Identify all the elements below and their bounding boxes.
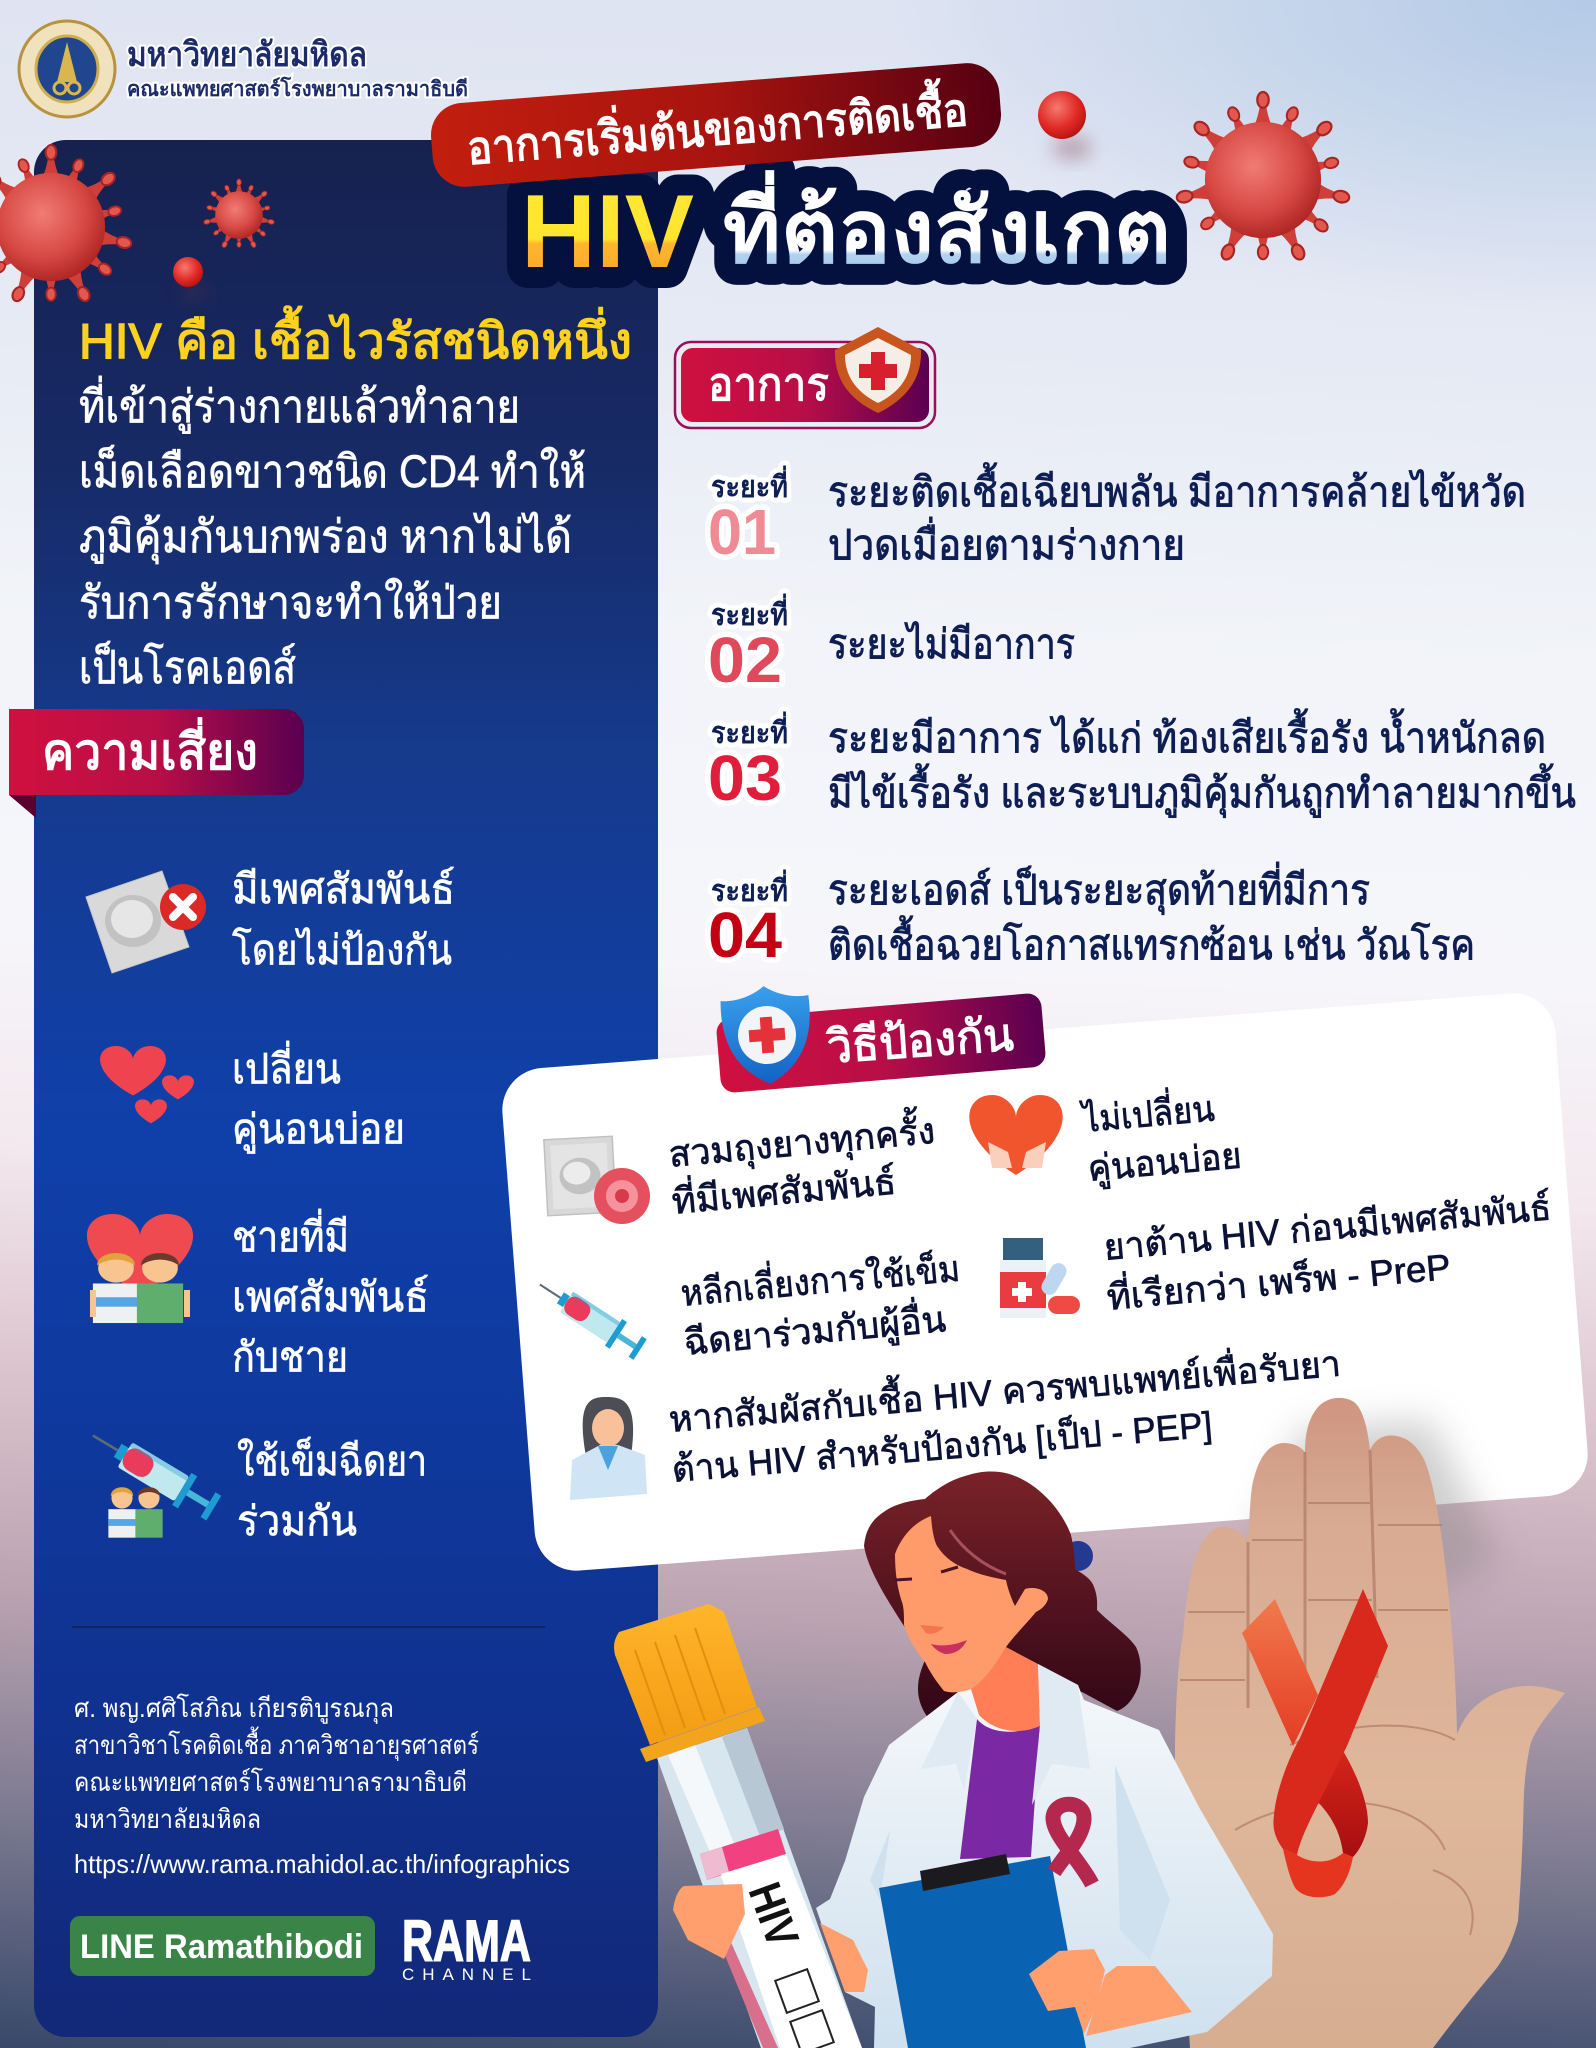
heading badge: prevention bbox=[715, 983, 1047, 1094]
hair clip bbox=[1063, 1541, 1093, 1571]
url: https://www.rama.mahidol.ac.th/infographics bbox=[74, 1849, 570, 1879]
risk item: sharing needles: ใช้เข็มฉีดยา bbox=[237, 1437, 427, 1484]
logo: Mahidol University bbox=[19, 21, 468, 117]
prevention item: avoid shared needles bbox=[531, 1244, 962, 1365]
prevention item: PEP: หากสัมผัสกับเชื้อ HIV ควรพบแพทย์เพื่อรับยา bbox=[667, 1337, 1342, 1440]
icon: shield with cross bbox=[835, 327, 921, 413]
heading badge: symptoms: อาการ bbox=[708, 358, 829, 410]
prevention item: one partner: ไม่เปลี่ยน bbox=[1078, 1084, 1216, 1140]
virus: top left large bbox=[0, 145, 133, 304]
risk item: unprotected sex bbox=[86, 866, 455, 973]
hair bbox=[864, 1471, 1141, 1719]
heading ribbon: risk: ความเสี่ยง bbox=[42, 718, 258, 780]
prevention item: condom: ที่มีเพศสัมพันธ์ bbox=[670, 1157, 898, 1222]
prevention item: PEP: ต้าน HIV สำหรับป้องกัน [เป็ป - PEP] bbox=[670, 1402, 1214, 1490]
ball: small red sphere bbox=[173, 257, 208, 300]
icon: medicine vial and pills bbox=[1000, 1238, 1080, 1318]
badge: LINE bbox=[70, 1916, 375, 1976]
risk item: men who have sex with men: กับชาย bbox=[232, 1334, 348, 1380]
risk item: men who have sex with men: เพศสัมพันธ์ bbox=[232, 1274, 429, 1320]
text block: author credit bbox=[74, 1693, 479, 1834]
title: HIV headline bbox=[521, 170, 1171, 290]
icon: male couple with heart bbox=[87, 1214, 193, 1323]
stage 1: ระยะติดเชื้อเฉียบพลัน มีอาการคล้ายไข้หวัด bbox=[828, 462, 1526, 515]
clipboard bbox=[879, 1856, 1086, 2048]
panel: prevention card bbox=[499, 990, 1591, 1574]
stage 1: ระยะที่ bbox=[711, 465, 788, 504]
prevention item: avoid shared needles: ฉีดยาร่วมกับผู้อื่น bbox=[682, 1294, 948, 1365]
icon: syringe and two men bbox=[83, 1419, 223, 1538]
shirt bbox=[960, 1719, 1040, 1859]
stage 1: 01 bbox=[708, 496, 776, 568]
illustration: doctor with test tube bbox=[614, 1471, 1273, 2048]
icon: doctor bbox=[570, 1397, 647, 1500]
risk item: men who have sex with men bbox=[87, 1209, 429, 1380]
stage 4: ติดเชื้อฉวยโอกาสแทรกซ้อน เช่น วัณโรค bbox=[828, 915, 1475, 968]
illustration: hand holding red ribbon bbox=[1175, 1398, 1565, 2048]
finger gaps and creases bbox=[1180, 1450, 1473, 1935]
collar bbox=[921, 1664, 1090, 1805]
logo: Mahidol University: มหาวิทยาลัยมหิดล bbox=[127, 36, 367, 74]
text block: author credit: มหาวิทยาลัยมหิดล bbox=[74, 1804, 261, 1834]
risk item: sharing needles bbox=[83, 1419, 427, 1544]
neck bbox=[971, 1647, 1040, 1731]
prevention item: one partner bbox=[969, 1084, 1243, 1191]
prevention item: condom: สวมถุงยางทุกครั้ง bbox=[666, 1104, 937, 1177]
prevention item: PEP bbox=[570, 1337, 1342, 1500]
cap bbox=[614, 1604, 757, 1745]
stage 2: 02 bbox=[708, 624, 782, 696]
stage 2: ระยะไม่มีอาการ bbox=[828, 621, 1075, 667]
icon: syringe bbox=[531, 1271, 649, 1363]
risk item: men who have sex with men: ชายที่มี bbox=[232, 1209, 349, 1260]
stage 4: ระยะเอดส์ เป็นระยะสุดท้ายที่มีการ bbox=[828, 862, 1370, 915]
text block: HIV explanation: ที่เข้าสู่ร่างกายแล้วทำลาย bbox=[79, 375, 520, 434]
prevention item: PrEP: ที่เรียกว่า เพร็พ - PreP bbox=[1105, 1242, 1452, 1318]
virus: top left small bbox=[203, 179, 275, 249]
text block: HIV explanation bbox=[79, 375, 586, 693]
icon: red ribbon on palm bbox=[1242, 1589, 1388, 1897]
ribbon on coat bbox=[1053, 1804, 1092, 1884]
coat bbox=[816, 1664, 1273, 2048]
text block: author credit: สาขาวิชาโรคติดเชื้อ ภาควิชาอายุรศาสตร์ bbox=[74, 1726, 479, 1761]
title: HIV headline: ที่ต้องสังเกต bbox=[723, 170, 1171, 281]
stage 4 bbox=[708, 862, 1475, 971]
text block: HIV explanation: เป็นโรคเอดส์ bbox=[79, 641, 296, 693]
logo: RAMA channel: CHANNEL bbox=[402, 1965, 531, 1984]
stage 1 bbox=[708, 462, 1526, 568]
heading badge: prevention: วิธีป้องกัน bbox=[825, 1008, 1015, 1073]
coat shading bbox=[870, 1765, 1170, 1960]
title: HIV headline: HIV bbox=[521, 174, 694, 290]
hand on clipboard bbox=[1029, 1949, 1105, 2034]
test tube: HIV bbox=[739, 1876, 809, 1954]
badge: LINE: LINE Ramathibodi bbox=[80, 1928, 363, 1966]
text block: HIV explanation: รับการรักษาจะทำให้ป่วย bbox=[79, 577, 502, 628]
prevention item: PrEP: ยาต้าน HIV ก่อนมีเพศสัมพันธ์ bbox=[1102, 1186, 1553, 1268]
prevention item: avoid shared needles: หลีกเลี่ยงการใช้เข็ม bbox=[679, 1244, 962, 1314]
prevention item: one partner: คู่นอนบ่อย bbox=[1086, 1135, 1243, 1191]
title: HIV headline: ที่ต้องสังเกต bbox=[723, 170, 1171, 281]
prevention item: PrEP bbox=[1000, 1186, 1553, 1318]
icon: condom packet bbox=[544, 1136, 650, 1224]
text block: HIV explanation: ภูมิคุ้มกันบกพร่อง หากไม่ได้ bbox=[79, 511, 572, 564]
risk item: changing partners bbox=[100, 1041, 405, 1154]
facial features bbox=[895, 1567, 967, 1654]
stage 2: ระยะที่ bbox=[711, 593, 788, 632]
stage 3: 03 bbox=[708, 742, 782, 814]
stage 1: ปวดเมื่อยตามร่างกาย bbox=[828, 517, 1185, 568]
hand shape bbox=[1175, 1398, 1565, 2048]
title: red pill subtitle: อาการเริ่มต้นของการติดเชื้อ bbox=[464, 75, 970, 175]
text block: author credit: ศ. พญ.ศศิโสภิณ เกียรติบูรณกุล bbox=[74, 1693, 394, 1724]
logo: RAMA channel: RAMA bbox=[402, 1909, 531, 1974]
stage 3 bbox=[708, 708, 1576, 818]
text block: author credit: คณะแพทยศาสตร์โรงพยาบาลรามาธิบดี bbox=[74, 1767, 467, 1797]
stage 4: 04 bbox=[708, 899, 782, 971]
text block: HIV explanation: เม็ดเลือดขาวชนิด CD4 ทำให้ bbox=[79, 445, 586, 497]
risk item: unprotected sex: โดยไม่ป้องกัน bbox=[232, 927, 452, 973]
risk item: sharing needles: ร่วมกัน bbox=[237, 1498, 357, 1544]
stage 4: ระยะที่ bbox=[711, 869, 788, 908]
risk item: changing partners: เปลี่ยน bbox=[232, 1041, 341, 1092]
ball: red sphere top bbox=[1038, 91, 1092, 160]
virus: top right large bbox=[1175, 92, 1351, 263]
icon: blue shield bbox=[719, 983, 815, 1087]
logo: Mahidol University: คณะแพทยศาสตร์โรงพยาบาลรามาธิบดี bbox=[127, 76, 468, 101]
icon: heart in hands bbox=[969, 1095, 1063, 1175]
face bbox=[895, 1516, 1048, 1692]
test tube bbox=[614, 1604, 862, 2048]
risk item: changing partners: คู่นอนบ่อย bbox=[232, 1106, 405, 1154]
heading ribbon: risk bbox=[9, 709, 304, 818]
heading badge: symptoms bbox=[675, 327, 935, 428]
prevention item: condom bbox=[544, 1104, 937, 1224]
icon: condom packet with cross bbox=[86, 871, 206, 973]
heading: what is HIV: HIV คือ เชื้อไวรัสชนิดหนึ่ง bbox=[79, 306, 632, 369]
arm behind tube bbox=[820, 1923, 868, 1992]
stage 3: ระยะที่ bbox=[711, 711, 788, 750]
stage 3: ระยะมีอาการ ได้แก่ ท้องเสียเรื้อรัง น้ำหนักลด bbox=[828, 708, 1546, 761]
logo: RAMA channel bbox=[402, 1909, 531, 1984]
forearm bbox=[1086, 1966, 1192, 2036]
title: red pill subtitle bbox=[429, 61, 1003, 189]
stage 2 bbox=[708, 593, 1075, 696]
icon: hearts bbox=[100, 1046, 194, 1123]
hand holding tube bbox=[673, 1884, 745, 1959]
title: HIV headline: HIV bbox=[521, 174, 694, 290]
panel: left info panel bbox=[34, 140, 658, 2037]
risk item: unprotected sex: มีเพศสัมพันธ์ bbox=[232, 866, 455, 912]
